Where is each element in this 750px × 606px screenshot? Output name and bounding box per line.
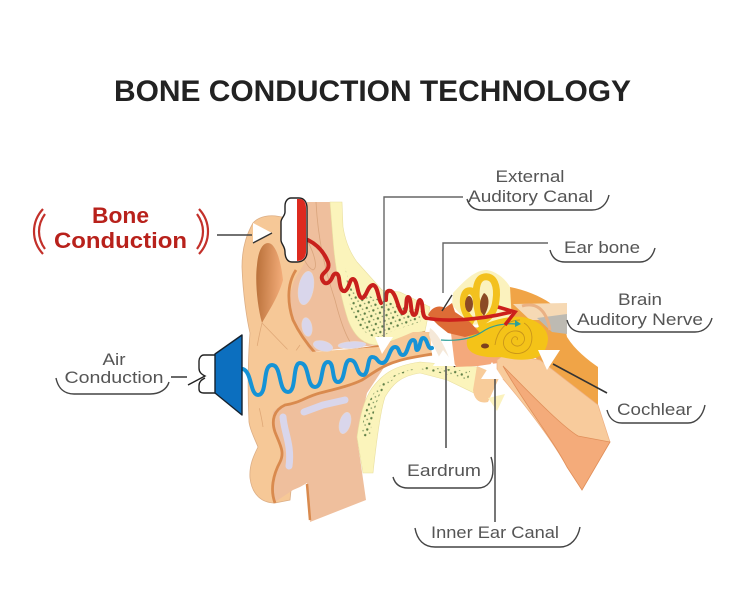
lower bone blob: [473, 366, 500, 402]
lower head tissue: [272, 366, 385, 522]
upper head tissue: [290, 202, 378, 352]
ear bones: [428, 303, 480, 337]
ear canal: [250, 332, 432, 410]
canal hollows: [465, 296, 473, 312]
bone conduction label: Bone: [92, 203, 149, 228]
external auditory canal label: [375, 167, 609, 354]
round window: [481, 344, 489, 348]
eardrum label: [393, 350, 493, 488]
air conduction label: [56, 350, 187, 394]
auditory nerve bundle: [513, 303, 567, 320]
sound brackets: [34, 209, 208, 254]
brain auditory nerve label: [567, 290, 712, 332]
external auditory canal label: Auditory Canal: [468, 187, 593, 206]
brain auditory nerve label: Auditory Nerve: [577, 310, 703, 329]
dark throat tube: [503, 366, 610, 490]
semicircular canals: [463, 277, 496, 322]
upper skull bone: [330, 202, 430, 345]
inner ear canal label: Inner Ear Canal: [431, 523, 559, 542]
lower tissue contour: [273, 354, 432, 503]
bone conduction device: [281, 198, 307, 262]
cochlear label: Cochlear: [617, 400, 692, 419]
peach ring: [522, 305, 550, 330]
title: BONE CONDUCTION TECHNOLOGY: [114, 75, 631, 108]
lower cartilage strips: [283, 400, 345, 466]
fold line: [255, 323, 300, 427]
bone conduction label: [34, 203, 208, 254]
inner ear canal label: [415, 362, 580, 547]
pointer: bone conduction: [217, 223, 272, 243]
air conduction label: Air: [102, 350, 126, 369]
external auditory canal label: External: [496, 167, 564, 186]
teal signal line: [441, 324, 518, 340]
speaker cone: [215, 335, 242, 415]
air conduction speaker: [188, 335, 242, 415]
cochlear label: [538, 350, 705, 423]
eardrum label: Eardrum: [407, 461, 481, 480]
upper tissue contour: [289, 270, 425, 354]
light throat band: [497, 354, 610, 490]
air conduction label: Conduction: [64, 368, 164, 387]
cochlea spiral: [495, 320, 532, 353]
lower skull bone: [357, 362, 477, 473]
red bone conduction wave: [308, 240, 426, 318]
outer ear: [242, 216, 318, 503]
ear bone label: Ear bone: [564, 238, 640, 257]
ear bone label: [442, 238, 655, 311]
concha hollow: [256, 243, 283, 323]
blue air conduction wave: [243, 338, 432, 395]
cochlea: [467, 317, 548, 360]
bone marrow dots lower: [362, 367, 470, 437]
bone conduction label: Conduction: [54, 228, 187, 253]
speaker back: [199, 358, 215, 393]
cream bone around canals: [452, 270, 512, 325]
orange outer inner-ear band: [505, 287, 598, 405]
eardrum membrane: [429, 328, 450, 361]
red arrow into cochlea: [426, 307, 515, 325]
jaw edge: [307, 484, 310, 520]
bone marrow dots upper: [345, 268, 425, 338]
brain auditory nerve label: Brain: [618, 290, 662, 309]
cartilage patches: [296, 270, 366, 435]
ear cross-section illustration: [242, 202, 610, 522]
middle ear skin: [450, 325, 505, 367]
